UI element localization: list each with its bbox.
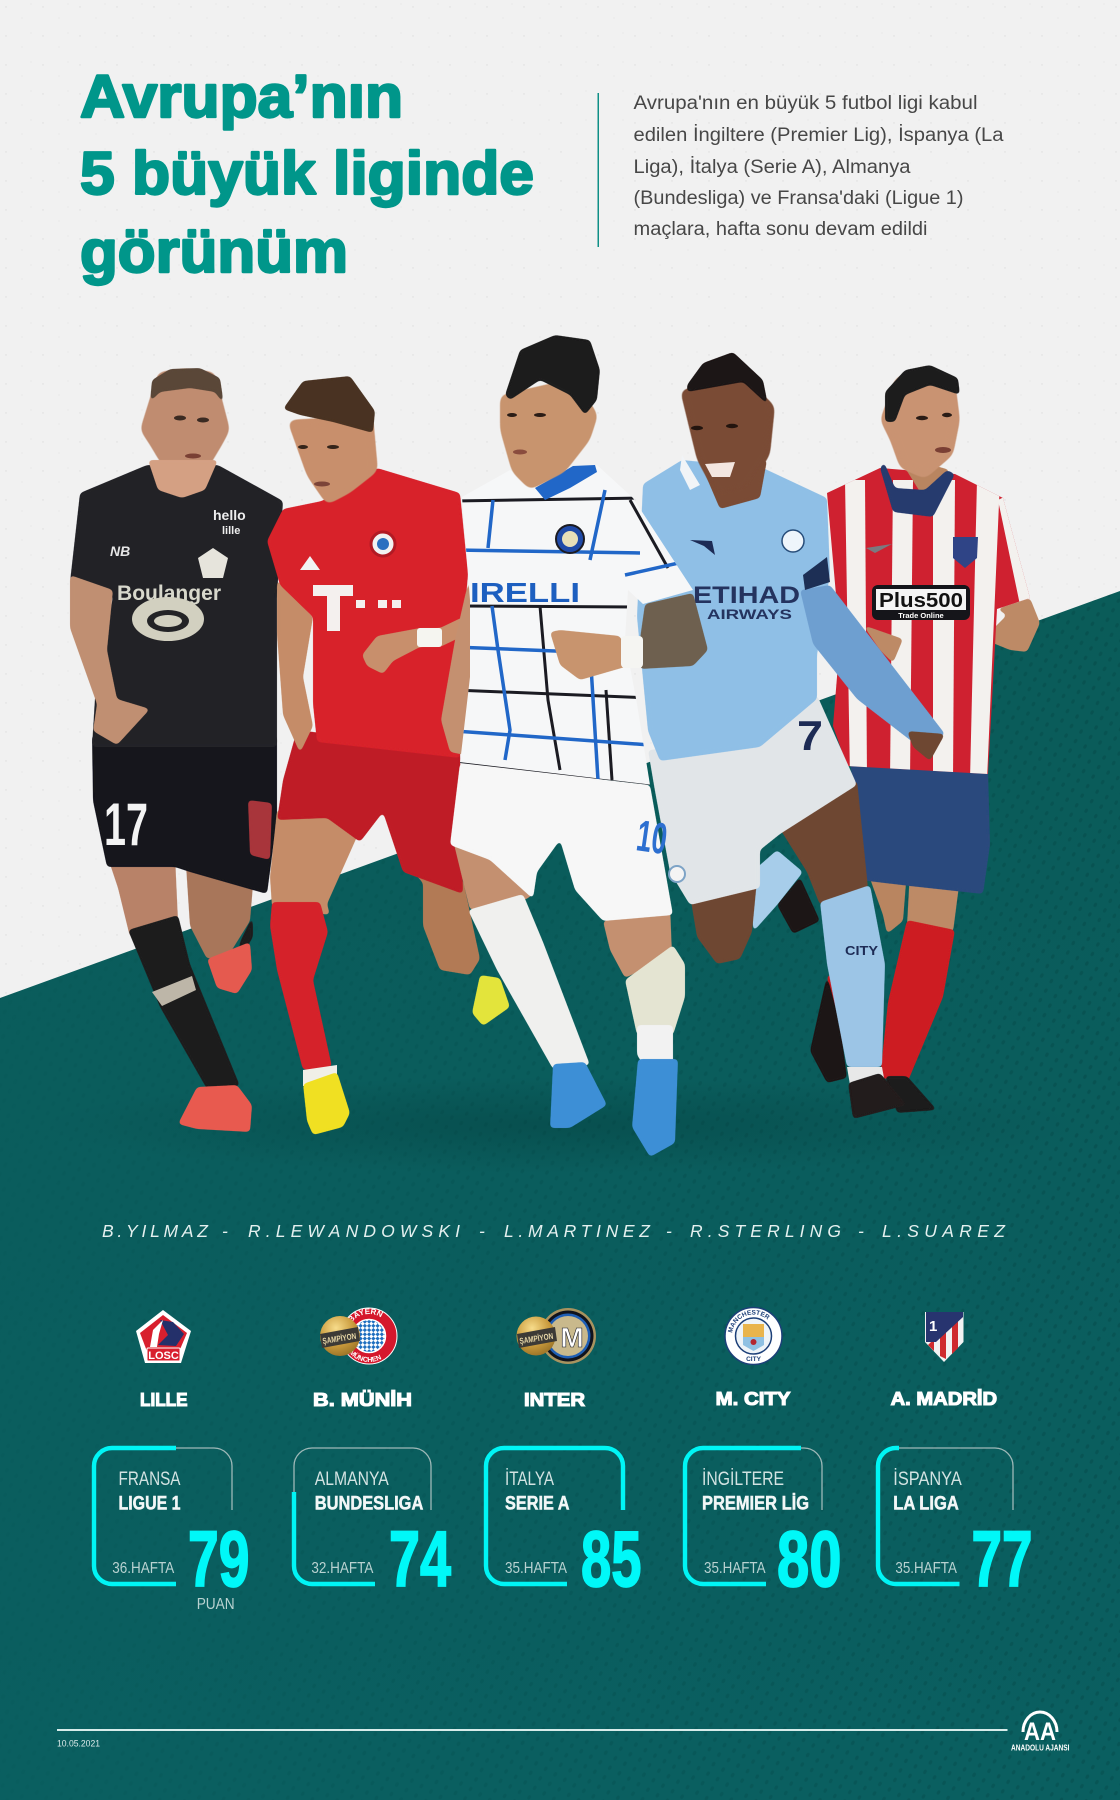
players names line bbox=[102, 1221, 1006, 1241]
points: Manchester City: 80 bbox=[777, 1514, 842, 1603]
logo: Manchester City: CITY bbox=[746, 1356, 762, 1363]
logo: Bayern with champion medal: ŞAMPİYON bbox=[322, 1331, 357, 1346]
player: B. Yılmaz: 17 bbox=[104, 791, 148, 858]
league: Lille: LIGUE 1 bbox=[118, 1493, 181, 1514]
player: L. Suarez: Plus500 bbox=[879, 590, 963, 612]
intro paragraph: (Bundesliga) ve Fransa'daki (Ligue 1) bbox=[634, 188, 964, 209]
teal diagonal background panel bbox=[0, 591, 1120, 1800]
logo: Bayern with champion medal: BAYERN bbox=[348, 1308, 383, 1321]
player: R. Sterling: AIRWAYS bbox=[707, 606, 792, 622]
intro paragraph: maçlara, hafta sonu devam edildi bbox=[634, 219, 928, 240]
week: Manchester City: 35.HAFTA bbox=[704, 1560, 766, 1577]
player: R. Sterling: 7 bbox=[797, 712, 823, 759]
players names line: - bbox=[222, 1221, 228, 1241]
column: Inter bbox=[486, 1308, 642, 1603]
points label: PUAN bbox=[197, 1596, 235, 1613]
player: L. Martinez: 10 bbox=[634, 811, 670, 864]
league: Inter bbox=[505, 1467, 570, 1514]
logo: Lille bbox=[136, 1310, 191, 1363]
player: R. Sterling: ETIHAD bbox=[693, 582, 800, 609]
column: Bayern Munich bbox=[292, 1308, 452, 1603]
players names line: B.YILMAZ bbox=[102, 1221, 209, 1241]
logo: Inter with champion medal: M bbox=[560, 1322, 584, 1353]
intro paragraph: edilen İngiltere (Premier Lig), İspanya (La bbox=[634, 125, 1004, 146]
week: Atletico Madrid: 35.HAFTA bbox=[895, 1560, 957, 1577]
player: R. Sterling: CITY bbox=[845, 943, 878, 958]
logo: Inter with champion medal: ŞAMPİYON bbox=[519, 1331, 554, 1346]
league: Inter: İTALYA bbox=[505, 1467, 554, 1490]
week: Lille: 36.HAFTA bbox=[112, 1560, 175, 1577]
logo: Inter with champion medal bbox=[516, 1308, 596, 1364]
title: 5 büyük liginde bbox=[80, 140, 534, 207]
stat box frame: Inter bbox=[486, 1448, 623, 1584]
players names line: - bbox=[858, 1221, 864, 1241]
stat box frame: Bayern Munich bbox=[294, 1448, 431, 1584]
stat box frame: Lille bbox=[94, 1448, 232, 1584]
points: Lille: 79 bbox=[188, 1514, 250, 1603]
date: 10.05.2021 bbox=[57, 1739, 100, 1749]
player: B. Yılmaz: lille bbox=[222, 525, 240, 537]
team name: Lille: LILLE bbox=[140, 1389, 188, 1410]
league: Manchester City: İNGİLTERE bbox=[702, 1467, 784, 1490]
logo: Atletico Madrid bbox=[925, 1312, 964, 1362]
logo: Lille: LOSC bbox=[148, 1350, 179, 1362]
team name: Manchester City: M. CITY bbox=[716, 1388, 791, 1409]
league: Atletico Madrid: LA LIGA bbox=[893, 1493, 959, 1514]
footer rule bbox=[57, 1729, 1008, 1731]
logo: Anadolu Agency: AA bbox=[1024, 1718, 1056, 1746]
title bbox=[80, 63, 534, 285]
league: Bayern Munich: BUNDESLIGA bbox=[315, 1493, 424, 1514]
team name: Inter: INTER bbox=[524, 1389, 585, 1410]
week: Bayern Munich: 32.HAFTA bbox=[311, 1560, 374, 1577]
column: Atletico Madrid bbox=[878, 1312, 1032, 1603]
player: L. Martinez: IRELLI bbox=[470, 577, 580, 608]
player: L. Suarez bbox=[810, 365, 1040, 1113]
column: Manchester City bbox=[682, 1306, 842, 1603]
league: Lille bbox=[118, 1468, 181, 1514]
stat box frame: Manchester City bbox=[685, 1448, 822, 1584]
intro paragraph bbox=[634, 93, 1004, 240]
player: L. Martinez bbox=[441, 335, 708, 1157]
logo: Atletico Madrid: 1 bbox=[929, 1318, 937, 1335]
league: Atletico Madrid: İSPANYA bbox=[893, 1467, 962, 1490]
league: Atletico Madrid bbox=[893, 1467, 962, 1514]
logo: Manchester City: MANCHESTER bbox=[728, 1310, 770, 1333]
team name: Bayern Munich: B. MÜNİH bbox=[313, 1389, 412, 1410]
players names line: L.SUAREZ bbox=[882, 1221, 1006, 1241]
column: Lille bbox=[94, 1310, 250, 1613]
league: Bayern Munich bbox=[315, 1468, 424, 1514]
ground shadow under players bbox=[40, 1077, 1080, 1173]
points: Inter: 85 bbox=[581, 1514, 642, 1603]
player: L. Suarez: Trade Online bbox=[898, 611, 944, 620]
player: B. Yılmaz: Boulanger bbox=[117, 582, 221, 605]
logo: Anadolu Agency bbox=[1011, 1712, 1070, 1753]
players names line: L.MARTINEZ bbox=[504, 1221, 651, 1241]
points: Bayern Munich: 74 bbox=[389, 1514, 451, 1603]
player: B. Yılmaz: NB bbox=[110, 543, 130, 559]
player: R. Sterling bbox=[637, 352, 945, 1119]
league: Bayern Munich: ALMANYA bbox=[315, 1468, 389, 1490]
player: B. Yılmaz bbox=[70, 368, 283, 1132]
players names line: - bbox=[479, 1221, 485, 1241]
players names line: - bbox=[666, 1221, 672, 1241]
league: Lille: FRANSA bbox=[118, 1468, 180, 1490]
team name: Atletico Madrid: A. MADRİD bbox=[891, 1388, 997, 1409]
league: Manchester City bbox=[702, 1467, 809, 1514]
title: Avrupa’nın bbox=[80, 63, 403, 130]
vertical divider bbox=[598, 93, 599, 247]
week: Inter: 35.HAFTA bbox=[505, 1560, 568, 1577]
intro paragraph: Liga), İtalya (Serie A), Almanya bbox=[634, 157, 911, 178]
league: Inter: SERIE A bbox=[505, 1493, 570, 1514]
intro paragraph: Avrupa'nın en büyük 5 futbol ligi kabul bbox=[634, 93, 978, 114]
logo: Bayern with champion medal: MÜNCHEN bbox=[350, 1350, 382, 1362]
logo: Manchester City bbox=[724, 1306, 783, 1366]
league: Manchester City: PREMIER LİG bbox=[702, 1493, 809, 1514]
players names line: R.LEWANDOWSKI bbox=[248, 1221, 460, 1241]
title: görünüm bbox=[80, 218, 348, 285]
player: R. Lewandowski bbox=[267, 376, 510, 1135]
points: Atletico Madrid: 77 bbox=[972, 1514, 1032, 1603]
players names line: R.STERLING bbox=[690, 1221, 841, 1241]
logo: Bayern with champion medal bbox=[320, 1308, 398, 1364]
logo: Anadolu Agency: ANADOLU AJANSI bbox=[1011, 1744, 1070, 1753]
player: B. Yılmaz: hello bbox=[213, 507, 246, 523]
stat box frame: Atletico Madrid bbox=[878, 1448, 1013, 1584]
